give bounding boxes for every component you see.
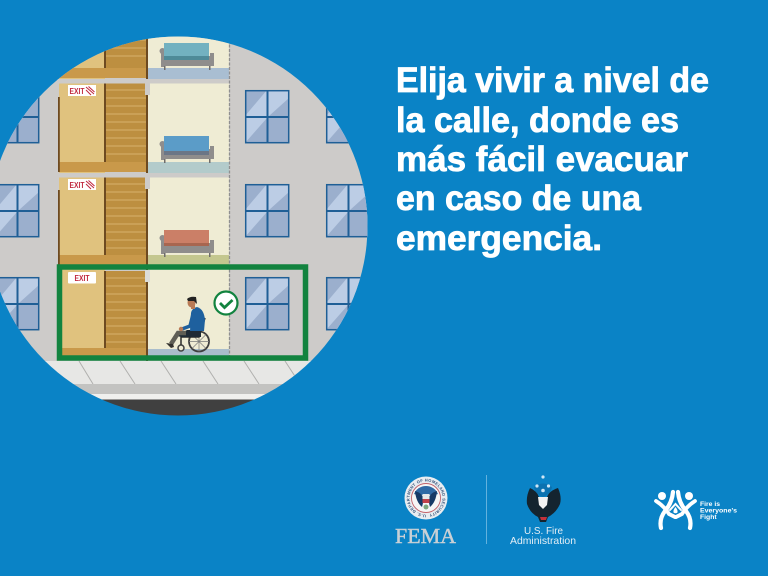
tagline — [700, 501, 737, 521]
USFA wordmark: U.S. Fire — [524, 525, 563, 537]
exit sign ground floor — [68, 272, 96, 284]
headline: la calle, donde es — [396, 101, 679, 140]
headline: Elija vivir a nivel de — [396, 61, 709, 100]
Fire is Everyone's Fight logo — [656, 492, 737, 528]
windows right column — [326, 108, 368, 330]
landing and room floors — [59, 68, 229, 356]
apartment rooms — [148, 30, 229, 356]
headline: más fácil evacuar — [396, 140, 688, 179]
stairwell side posts — [58, 97, 60, 265]
headline: emergencia. — [396, 219, 602, 258]
windows left column — [0, 90, 39, 330]
green highlight box — [60, 267, 306, 358]
exit sign middle — [68, 179, 96, 190]
party wall dashed lines — [228, 40, 230, 356]
DHS seal: U.S. DEPARTMENT OF HOMELAND SECURITY — [406, 478, 446, 518]
logo divider — [486, 475, 487, 544]
tagline: Everyone's — [700, 508, 737, 514]
figures emblem — [656, 492, 695, 528]
exit sign upper: EXIT — [70, 87, 85, 96]
sofa top — [160, 43, 214, 70]
building wall — [0, 30, 388, 362]
check badge — [214, 292, 238, 314]
floor slabs — [57, 79, 229, 282]
building illustration in circle — [0, 36, 368, 416]
eagle emblem — [527, 475, 561, 522]
exit sign ground floor: EXIT — [74, 274, 90, 283]
stairwell walls — [59, 30, 105, 356]
sofa lower — [160, 230, 214, 257]
U.S. Fire Administration logo: Administration — [510, 535, 576, 547]
stairs — [104, 38, 148, 361]
FEMA logo — [395, 476, 456, 548]
exit sign upper — [68, 85, 96, 96]
sofa middle — [160, 136, 214, 163]
exit sign middle: EXIT — [70, 181, 85, 190]
headline — [396, 61, 709, 258]
tagline: Fight — [700, 514, 717, 521]
windows centre column — [245, 90, 289, 330]
person in wheelchair — [166, 297, 209, 352]
FEMA wordmark: FEMA — [395, 524, 456, 548]
headline: en caso de una — [396, 179, 642, 218]
U.S. Fire Administration logo — [510, 475, 576, 547]
tagline: Fire is — [700, 501, 720, 508]
sidewalk — [45, 361, 311, 416]
